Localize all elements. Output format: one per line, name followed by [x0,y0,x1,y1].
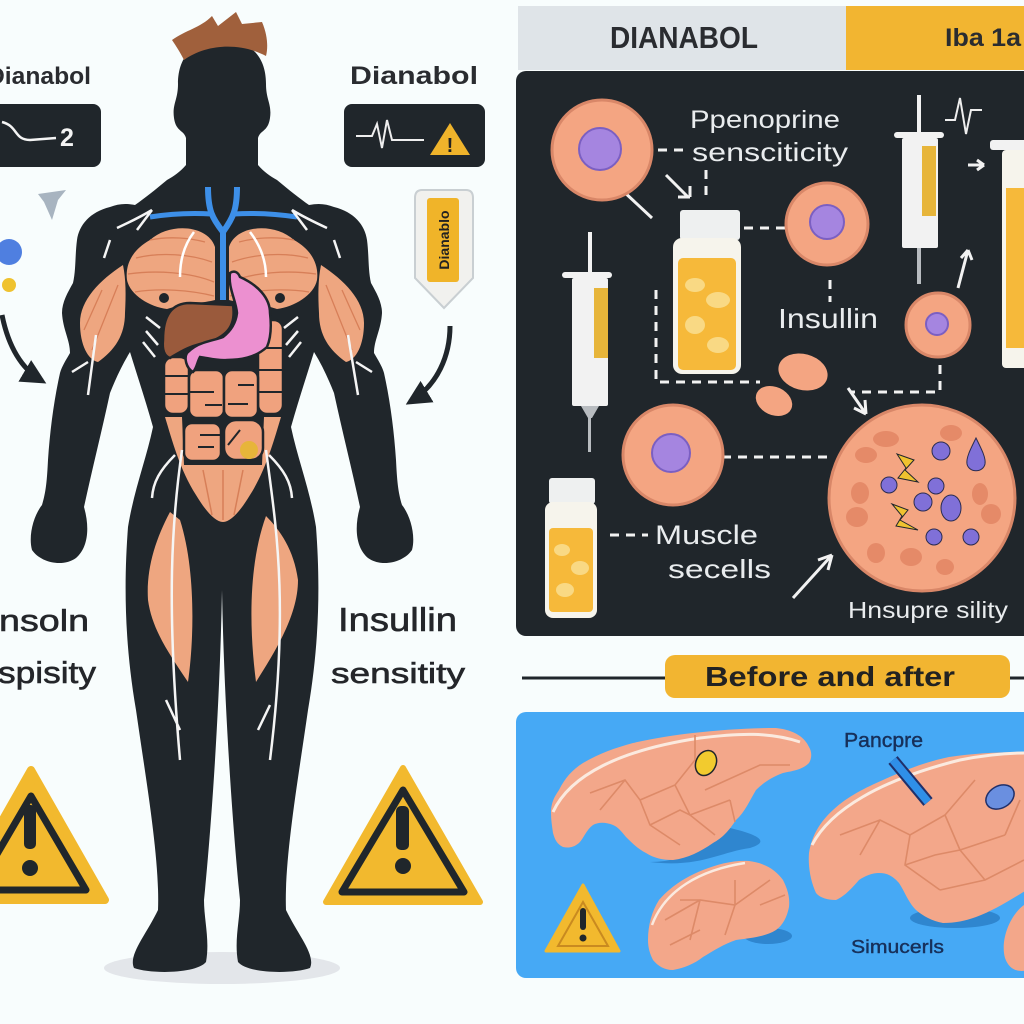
divider line [522,676,1024,680]
tag: vial label: Dianablo [436,210,452,270]
pancreas cropped [1004,900,1024,971]
text: panel labels [655,106,1009,623]
text: panel labels: Insullin [778,303,878,334]
panel: dark cell diagram [516,71,1024,636]
pancreas small [648,861,789,970]
text: panel labels: Ppenoprine [690,106,840,134]
pancreas after [809,752,1024,923]
large pancreas cell [829,405,1015,591]
large vial [673,210,741,374]
intestines [164,320,283,522]
header bar: left grey tab [518,6,848,70]
arrow: small grey down [38,190,66,220]
dark badge: right graph [344,104,485,167]
pancreas before [551,728,811,860]
floor shadow [104,952,340,984]
text: pancreas label: Pancpre [844,730,923,752]
text: panel labels: Muscle [655,520,758,550]
icon: blue panel warning [546,885,619,951]
heading pill: before and after [665,655,1010,698]
text: left insulin sensitivity: nsoln [0,603,89,638]
header bar: left grey tab: DIANABOL [610,20,758,55]
stomach [186,272,271,372]
text: right insulin sensitivity: sensitity [331,658,466,690]
label: top right dianabol: Dianabol [350,62,478,90]
pointer [893,760,928,802]
liver [163,303,234,358]
dark badge: right graph: ! [447,135,453,157]
header bar: right yellow tab [846,6,1024,70]
white tendon lines [72,210,372,760]
text: panel labels: secells [668,554,771,584]
arm muscles [80,265,364,362]
chest muscles [127,228,317,309]
text: panel labels: sensciticity [692,137,848,167]
dashed connectors [610,150,940,535]
icon: right warning [326,768,480,902]
silhouette [31,40,413,972]
text: right insulin sensitivity: Insullin [338,601,457,638]
text: panel labels: Hnsupre sility [848,597,1009,623]
arrow: right curved [410,326,450,402]
arrows [622,160,984,598]
lower abdominal muscle [165,417,281,522]
cells [552,100,970,505]
left syringe [562,232,612,452]
gall spot [240,441,258,459]
small vial [545,478,597,618]
panel: body figure [31,12,413,984]
panel: blue before and after [516,712,1024,978]
icon: left warning [0,770,105,900]
text: right insulin sensitivity [331,601,466,690]
dark badge: left graph: 2 [60,124,74,152]
header bar: right yellow tab: Iba 1a [945,24,1022,52]
heading pill: before and after: Before and after [705,661,955,692]
blue vessels [150,187,297,300]
dark badge: left graph [0,104,101,167]
arrow: left curved [2,315,42,381]
icon: molecule dots [0,239,22,292]
shadows [650,828,1000,944]
text: left insulin sensitivity [0,603,97,690]
leg muscles [148,512,298,682]
right cropped vial [990,140,1024,368]
right syringe [894,95,982,284]
text: left insulin sensitivity: spisity [0,655,97,690]
tag: vial label [415,190,473,308]
hair [172,12,267,60]
text: simucerls: Simucerls [851,937,944,957]
